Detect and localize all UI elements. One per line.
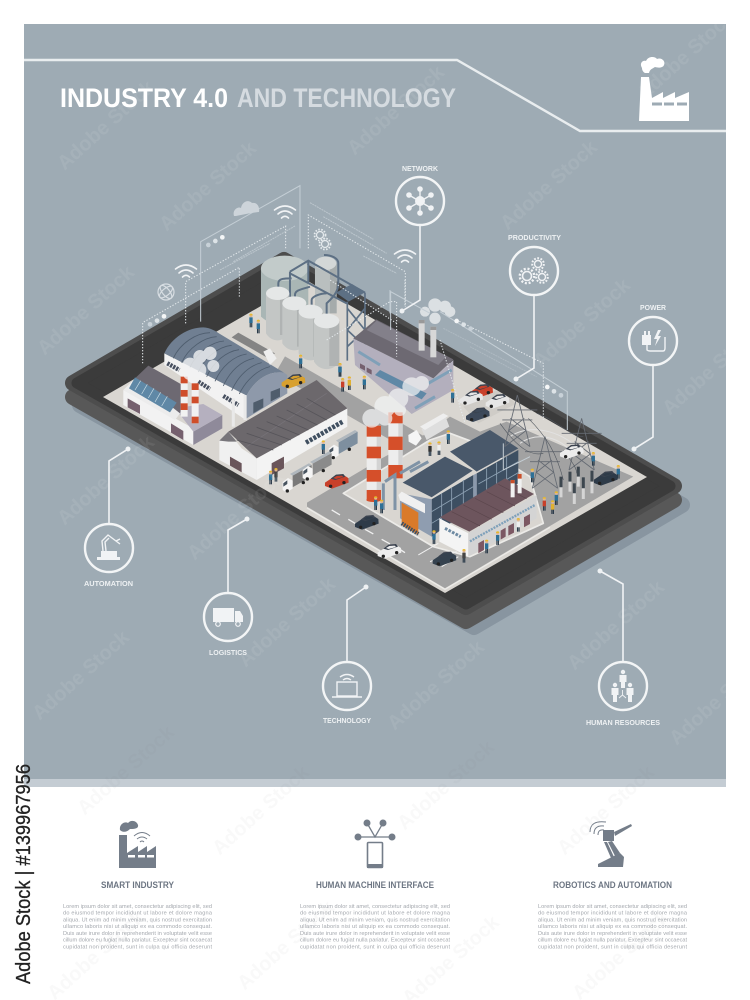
body text: do eiusmod tempor incididunt ut labore et dolore magna [63, 911, 213, 917]
stock watermarks: Adobe Stock [33, 261, 139, 360]
arched building smoke [183, 347, 219, 380]
stock watermarks: Adobe Stock [28, 626, 134, 725]
label: PRODUCTIVITY [508, 233, 561, 242]
long white truck [408, 413, 449, 446]
phone side [73, 274, 674, 621]
icon: phone with nodes [354, 820, 396, 868]
central plant [338, 298, 620, 566]
stock watermarks: Adobe Stock [183, 466, 289, 565]
dark hall [398, 430, 518, 537]
leader line [347, 587, 366, 662]
phone face [73, 260, 674, 607]
power lines and pylons [497, 395, 602, 504]
icon: laptop with wifi [332, 674, 362, 697]
leader line [109, 449, 128, 523]
body text: cupidatat non proident, sunt in culpa qui officia deserunt [63, 944, 212, 950]
main panel background [24, 24, 726, 779]
leader line [402, 226, 420, 311]
industrial city scene [123, 255, 633, 589]
workers [338, 363, 620, 563]
tall striped chimneys [366, 412, 403, 502]
stock watermarks: Adobe Stock [208, 761, 314, 860]
label: HUMAN RESOURCES [586, 718, 660, 727]
label: NETWORK [402, 164, 439, 173]
column: robotics and automation [538, 822, 688, 950]
icon: wifi centre [274, 206, 296, 218]
solar panels [129, 377, 177, 412]
arched building [164, 327, 287, 421]
icon: gears [314, 230, 330, 250]
title [60, 83, 456, 113]
icon: smart factory [119, 821, 156, 868]
phone screen [103, 280, 647, 593]
panel bottom stripe [24, 779, 726, 787]
icon: plug and bolt [642, 330, 665, 351]
phone shadow [80, 280, 682, 627]
icon: wifi left [176, 265, 196, 277]
body text [300, 904, 451, 950]
smoke from back chimneys [420, 298, 455, 324]
cars [355, 384, 618, 566]
circle [85, 524, 133, 572]
icon: wifi right [394, 250, 416, 262]
icon: factory [639, 57, 689, 121]
smartphone [73, 260, 682, 627]
stock watermarks: Adobe Stock [53, 431, 159, 530]
striped chimneys [181, 377, 245, 427]
circle [599, 662, 647, 710]
leader line [228, 519, 247, 593]
column: human machine interface [300, 820, 451, 950]
callout: automation [84, 446, 133, 588]
tall silo [315, 257, 337, 313]
faint data lines [220, 203, 397, 273]
heading: SMART INDUSTRY [101, 880, 174, 890]
label: TECHNOLOGY [323, 716, 371, 725]
stock id side text: Adobe Stock | #139967956 [13, 764, 35, 984]
stock watermarks: Adobe Stock [563, 576, 669, 675]
leader line [634, 366, 653, 449]
icon: globe [158, 284, 174, 300]
steel frame back [278, 255, 365, 315]
body text: ullamco laboris nisi ut aliquip ex ea commodo consequat. [538, 924, 687, 930]
circle [629, 317, 677, 365]
body text: do eiusmod tempor incididunt ut labore et dolore magna [300, 911, 451, 917]
callout: network [396, 164, 444, 314]
body text: Lorem ipsum dolor sit amet, consectetur adipiscing elit, sed [538, 904, 687, 910]
body text: Duis aute irure dolor in reprehenderit in voluptate velit esse [538, 931, 687, 937]
body text: cupidatat non proident, sunt in culpa qui officia deserunt [538, 944, 687, 950]
circle [510, 247, 558, 295]
header rule [24, 60, 726, 131]
stock watermarks: Adobe Stock [53, 76, 159, 175]
phone glass [77, 263, 670, 604]
icon: robot arm [97, 535, 120, 560]
chimneys [419, 320, 436, 357]
callout: human resources [586, 568, 660, 727]
stock watermarks: Adobe Stock [393, 736, 499, 835]
body text: aliqua. Ut enim ad minim veniam, quis nostrud exercitation [300, 917, 450, 923]
warehouse [219, 380, 347, 480]
brown roof building [439, 474, 537, 557]
circle [204, 593, 252, 641]
stock watermarks: Adobe Stock [343, 61, 449, 160]
icon: truck [213, 608, 243, 626]
pipes [383, 462, 428, 510]
body text: do eiusmod tempor incididunt ut labore et dolore magna [538, 911, 688, 917]
trucks [232, 333, 358, 493]
body text [63, 904, 213, 950]
body text: cupidatat non proident, sunt in culpa qui officia deserunt [300, 944, 450, 950]
callout: power [629, 303, 677, 452]
back factory [353, 319, 453, 414]
stock watermarks: Adobe Stock [496, 136, 602, 235]
leader line [600, 571, 623, 662]
body text: aliqua. Ut enim ad minim veniam, quis nostrud exercitation [538, 917, 687, 923]
icon: network [406, 186, 434, 216]
circle [396, 177, 444, 225]
column: smart industry [63, 821, 213, 950]
label: POWER [640, 303, 667, 312]
big tank [261, 256, 308, 325]
stock watermarks: Adobe Stock [529, 274, 635, 373]
icon: people [612, 670, 634, 702]
smoke from tall chimneys [362, 376, 429, 428]
body text: cillum dolore eu fugiat nulla pariatur. Excepteur sint occaecat [538, 938, 687, 944]
body text: Lorem ipsum dolor sit amet, consectetur adipiscing elit, sed [63, 904, 212, 910]
transformers [561, 467, 592, 504]
body text [538, 904, 688, 950]
stock watermarks: Adobe Stock [383, 636, 489, 735]
label: AUTOMATION [84, 579, 133, 588]
leader line [516, 296, 534, 379]
body text: Duis aute irure dolor in reprehenderit in voluptate velit esse [63, 931, 212, 937]
floating interface overlays [143, 186, 567, 470]
workers and cars near warehouse [249, 314, 349, 489]
body text: ullamco laboris nisi ut aliquip ex ea commodo consequat. [63, 924, 212, 930]
heading: HUMAN MACHINE INTERFACE [316, 880, 434, 890]
stock watermarks: Adobe Stock [633, 6, 739, 105]
heading: ROBOTICS AND AUTOMATION [553, 880, 672, 890]
body text: cillum dolore eu fugiat nulla pariatur. Excepteur sint occaecat [300, 938, 450, 944]
small silos [266, 287, 339, 369]
tanks and steel structure [261, 255, 365, 369]
callout: technology [323, 584, 371, 725]
left interface panels [143, 186, 430, 363]
stock watermarks: Adobe Stock [73, 721, 179, 820]
left flat building with solar panels [123, 366, 245, 445]
stock watermarks: Adobe Stock [233, 896, 339, 995]
callout: productivity [508, 233, 561, 382]
body text: Duis aute irure dolor in reprehenderit in voluptate velit esse [300, 931, 450, 937]
stock watermarks: Adobe Stock [155, 137, 261, 236]
circle [323, 662, 371, 710]
title: AND TECHNOLOGY [237, 83, 456, 113]
icon: gears [520, 258, 548, 283]
body text: aliqua. Ut enim ad minim veniam, quis nostrud exercitation [63, 917, 212, 923]
steel frame front [336, 284, 365, 361]
icon: cloud [234, 201, 259, 216]
body text: Lorem ipsum dolor sit amet, consectetur adipiscing elit, sed [300, 904, 450, 910]
icon: robot arm [590, 822, 632, 867]
title: INDUSTRY 4.0 [60, 83, 228, 113]
right interface panels [330, 280, 567, 470]
stock watermarks: Adobe Stock [553, 761, 659, 860]
label: LOGISTICS [209, 648, 247, 657]
body text: cillum dolore eu fugiat nulla pariatur. Excepteur sint occaecat [63, 938, 212, 944]
body text: ullamco laboris nisi ut aliquip ex ea commodo consequat. [300, 924, 450, 930]
callout: logistics [204, 516, 252, 657]
stock watermarks: Adobe Stock [234, 573, 340, 672]
menu dots [148, 235, 225, 327]
header [24, 57, 726, 131]
roads [280, 365, 633, 589]
